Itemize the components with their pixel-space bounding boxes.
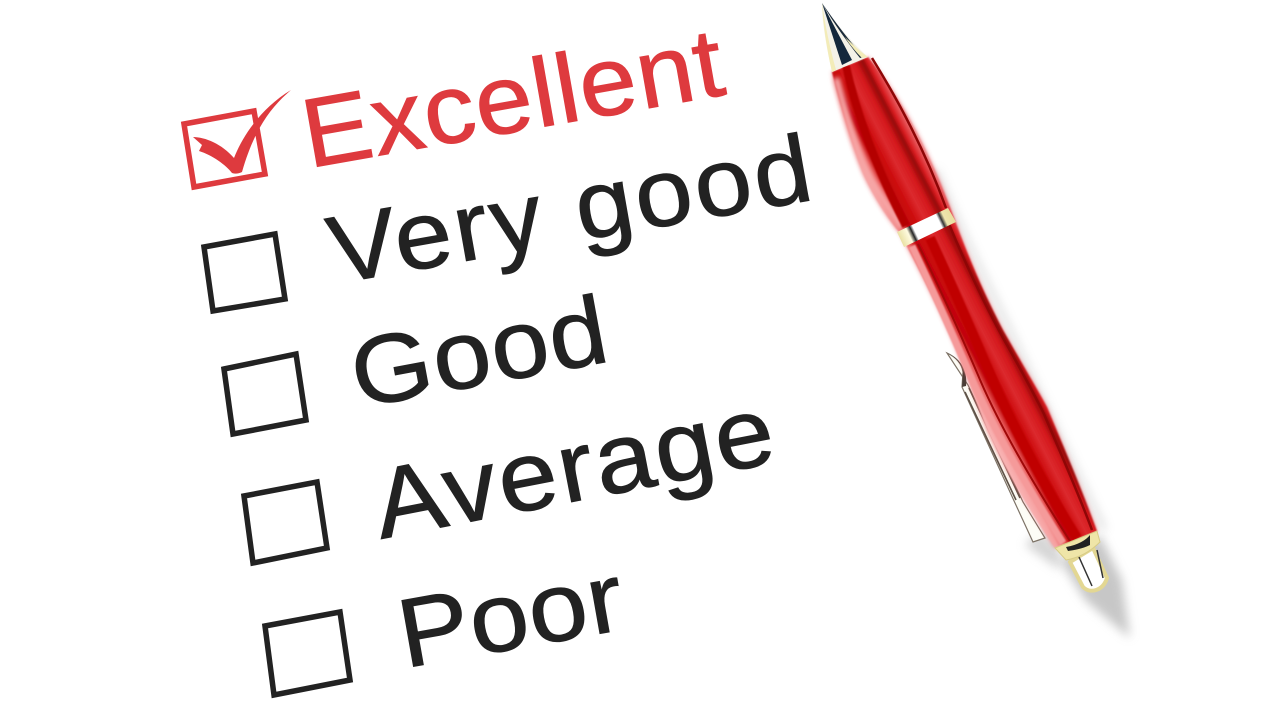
- label: Average: Average: [364, 374, 783, 560]
- option: Very good: [204, 115, 819, 311]
- label: Poor: Poor: [390, 542, 631, 689]
- pen body halo: [832, 57, 1097, 548]
- checkbox: checked: [184, 111, 265, 187]
- option: Good: [224, 276, 616, 434]
- pen button: [1070, 548, 1107, 591]
- label: Very good: Very good: [320, 115, 819, 305]
- label: Good: Good: [342, 276, 616, 429]
- pen body: [832, 57, 1097, 548]
- label: Excellent: Excellent: [294, 8, 731, 189]
- checkbox: Good: [224, 354, 306, 434]
- option: Average: [244, 374, 783, 563]
- red pen: [822, 3, 1130, 638]
- pen shadow: [935, 170, 1130, 638]
- option: Excellent (checked): [184, 8, 731, 189]
- checkbox: Poor: [265, 612, 350, 695]
- pen middle ring: [897, 208, 956, 247]
- checkbox: Average: [244, 482, 327, 563]
- pen tip: [822, 3, 868, 72]
- icon: check mark: [193, 90, 291, 174]
- pen clip: [947, 353, 1045, 542]
- pen bottom ring: [1055, 531, 1100, 560]
- option: Poor: [265, 542, 631, 695]
- checkbox: Very good: [204, 234, 285, 311]
- body reflection lines: [836, 58, 1092, 543]
